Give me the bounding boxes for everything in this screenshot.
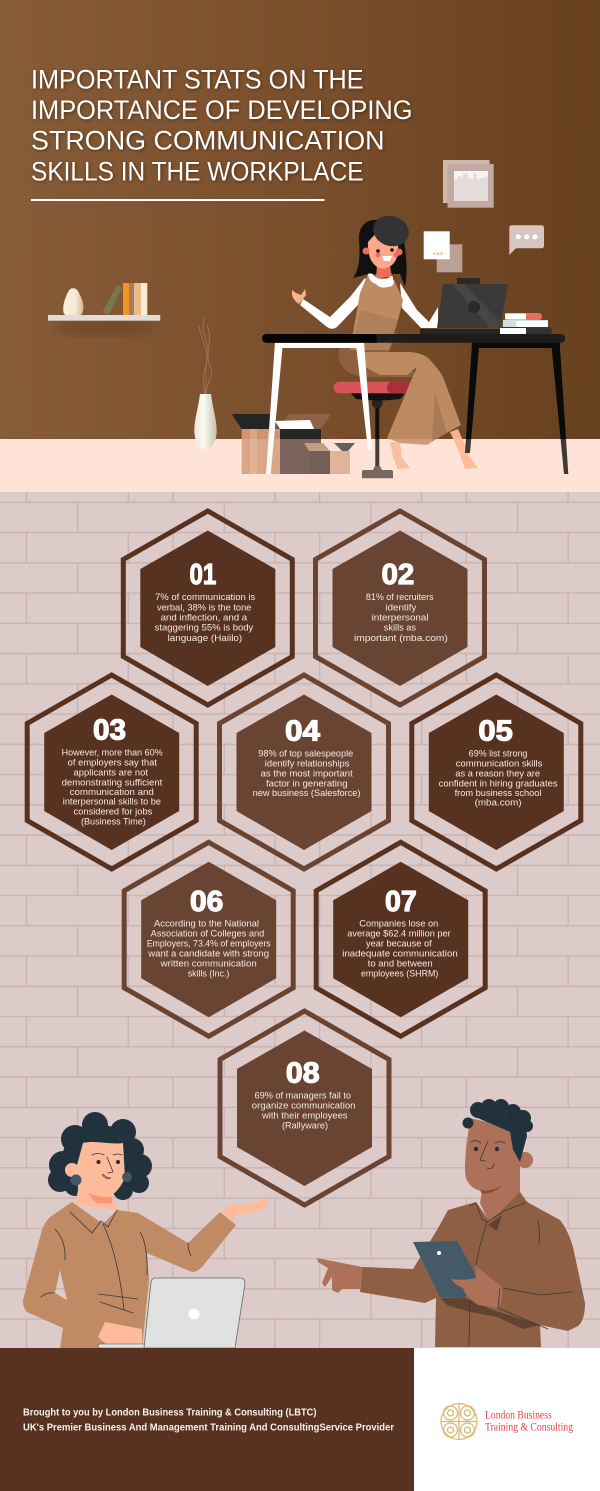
hexagon 01 [123,511,292,705]
hexagon 01: language (Haiilo) [168,633,242,643]
hexagon 05: as a reason they are [455,769,540,779]
hexagon 06: 06 [190,886,223,918]
hexagon 04: new business (Salesforce) [253,788,360,798]
hexagon 03: interpersonal skills to be [63,797,161,807]
logo: knot emblem [441,1404,477,1440]
hexagon 05: communication skills [456,759,543,769]
hexagon 07: average $62.4 million per [347,929,451,939]
hexagon 03: of employers say that [68,758,157,768]
title: STRONG COMMUNICATION [31,126,385,156]
hexagon 04: as the most important [261,769,353,779]
hexagon 08: with their employees [261,1111,348,1121]
hexagon 03: demonstrating sufficient [62,777,163,787]
hexagon 06: want a candidate with strong [147,949,269,959]
footer text: UK's Premier Business And Management Training And ConsultingService Provider [23,1422,394,1434]
woman at desk [292,211,478,469]
hexagon 02: skills as [384,623,416,633]
logo text: Training & Consulting [485,1422,573,1434]
hexagon 07: to and between [368,959,433,969]
hexagon 04: factor in generating [266,778,348,788]
hexagon 07: 07 [385,886,417,918]
hexagon 01: and inflection, and a [161,612,248,622]
footer band [0,1348,414,1491]
hexagon 01: 01 [190,559,216,591]
footer text: Brought to you by London Business Training & Consulting (LBTC) [23,1408,316,1418]
hexagon 04 [220,675,388,869]
hexagon 03: applicants are not [74,767,148,777]
icon: speech bubble [509,225,544,255]
hexagon 02 [316,511,484,705]
hexagon 07 [316,842,485,1036]
hexagon 05: from business school [455,788,542,798]
hexagon 07: year because of [366,939,432,949]
hexagon 03: communication and [70,787,154,797]
hexagon 05: confident in hiring graduates [439,778,558,788]
hexagon 04: 98% of top salespeople [258,749,353,759]
hexagon 03: (Business Time) [81,816,146,826]
man with tablet [317,1099,585,1347]
hexagon 05 [412,675,581,869]
hexagon 06: written communication [160,959,257,969]
footer logo panel [414,1348,600,1491]
hexagon 03: considered for jobs [74,807,153,817]
hexagon 05: 69% list strong [469,749,527,759]
hexagon 06: skills (Inc.) [188,969,229,979]
hexagon 03 [27,675,196,869]
logo text: London Business [485,1410,552,1422]
hexagon 06: According to the National [154,919,259,929]
hexagon 08: (Rallyware) [282,1120,328,1130]
hexagon 05: (mba.com) [475,798,522,808]
hexagon 02: 02 [382,559,414,591]
cardboard boxes [232,414,355,474]
hexagon 01: staggering 55% is body [155,623,254,633]
hexagon 02: 81% of recruiters [366,592,434,602]
hexagon 07: Companies lose on [359,919,438,929]
header wall background [0,0,600,440]
office chair [334,382,410,478]
icon: framed picture [443,160,494,208]
hexagon 02: interpersonal [372,612,429,622]
woman presenting with laptop [23,1112,269,1348]
hexagon 06: Association of Colleges and [151,929,264,939]
floor vase with dry stems [194,318,217,449]
hexagon 04: identify relationships [265,759,350,769]
title: IMPORTANCE OF DEVELOPING [31,95,412,125]
hexagon 07: inadequate communication [342,949,458,959]
hexagon 08: 69% of managers fail to [254,1091,351,1101]
hexagon 08: 08 [286,1058,320,1090]
hexagon 03: However, more than 60% [62,748,163,758]
hexagon 05: 05 [478,716,513,748]
hexagon 03: 03 [93,714,126,746]
floor tint over lower furniture [225,439,575,479]
hexagon 08: organize communication [252,1101,356,1111]
hexagon 08 [220,1011,389,1205]
laptop and book stack on desk [420,278,552,334]
title underline [31,199,324,201]
hexagon 01: 7% of communication is [155,592,256,602]
brick wall background [0,492,600,1348]
icon: document cards [424,231,462,272]
logo text [485,1410,573,1434]
hexagon 02: identify [385,602,417,612]
title [31,64,412,186]
hexagon 02: important (mba.com) [354,633,448,643]
footer text [23,1408,394,1434]
wall shelf with vase and books [48,283,160,336]
hexagon 06 [124,842,293,1036]
hexagon 04: 04 [285,716,320,748]
floor [0,439,600,492]
title: SKILLS IN THE WORKPLACE [31,156,364,186]
desk [262,334,568,474]
title: IMPORTANT STATS ON THE [31,64,364,94]
hexagon 01: verbal, 38% is the tone [157,602,251,612]
hexagon 07: employees (SHRM) [361,969,438,979]
hexagon 06: Employers, 73.4% of employers [147,939,271,949]
